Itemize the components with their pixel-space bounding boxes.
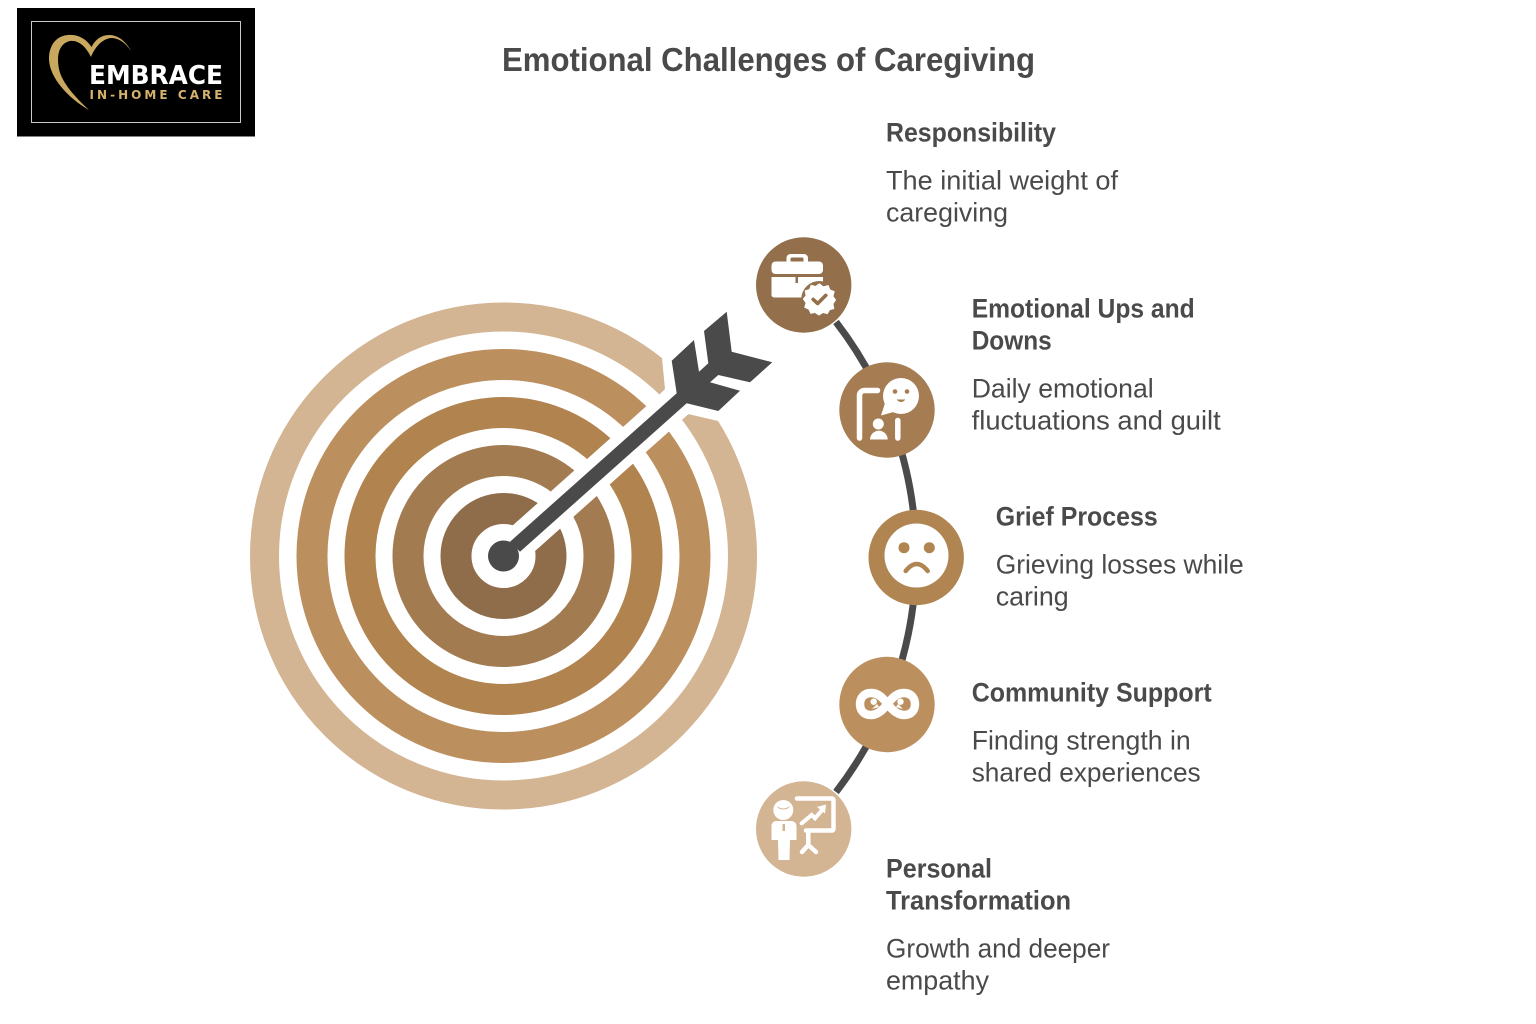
text: Personal Transformation (886, 853, 1110, 996)
text: Grief Process: Grieving losses while (996, 550, 1244, 580)
text: Personal Transformation: Personal (886, 853, 992, 883)
text: Emotional Ups and Downs (972, 293, 1221, 436)
logo: Embrace In-Home Care: IN-HOME CARE (90, 88, 222, 102)
text: Community Support (972, 677, 1212, 788)
step 5 icon: presenter with chart (756, 781, 851, 877)
text: Emotional Ups and Downs: Emotional Ups and (972, 293, 1195, 323)
step 3 icon: sad face (868, 510, 964, 605)
text: Emotional Ups and Downs: Downs (972, 325, 1052, 355)
text: Personal Transformation: Transformation (886, 885, 1071, 915)
text: Grief Process: Grief Process (996, 501, 1158, 531)
target with arrow (264, 300, 790, 795)
title: Emotional Challenges of Caregiving (502, 41, 1035, 78)
text: Responsibility: caregiving (886, 198, 1008, 228)
step 1 icon: briefcase with badge (756, 237, 851, 333)
text: Responsibility (886, 118, 1118, 228)
logo: Embrace In-Home Care (17, 8, 255, 136)
text: Emotional Ups and Downs: fluctuations and guilt (972, 406, 1221, 436)
text: Community Support: Community Support (972, 677, 1212, 707)
text: Grief Process: caring (996, 582, 1069, 612)
text: Personal Transformation: empathy (886, 966, 989, 996)
connector arc (836, 322, 916, 792)
text: Responsibility: Responsibility (886, 118, 1056, 148)
text: Community Support: shared experiences (972, 758, 1201, 788)
arrow (488, 312, 772, 572)
text: Grief Process (996, 501, 1244, 612)
step 2 icon: person with speech bubble (839, 362, 935, 458)
logo: Embrace In-Home Care: EMBRACE (89, 61, 223, 91)
text: Community Support: Finding strength in (972, 726, 1191, 756)
step 4 icon: infinity (839, 657, 935, 752)
text: Responsibility: The initial weight of (886, 166, 1118, 196)
target rings (264, 300, 790, 795)
text: Personal Transformation: Growth and deeper (886, 934, 1110, 964)
text: Emotional Ups and Downs: Daily emotional (972, 374, 1154, 404)
